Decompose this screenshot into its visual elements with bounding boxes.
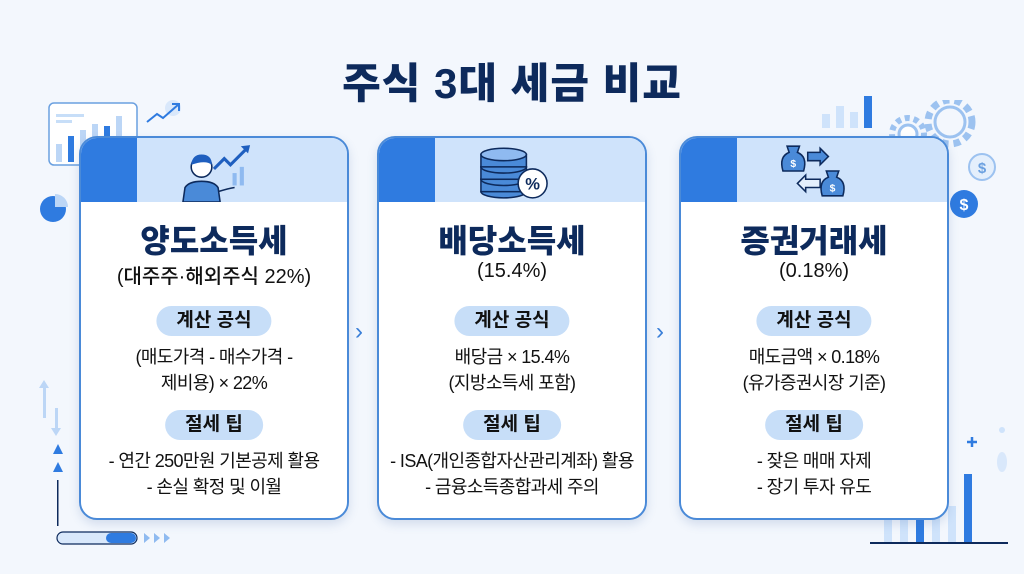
tips text: - 손실 확정 및 이월 bbox=[147, 477, 281, 497]
heading: 양도소득세 bbox=[140, 223, 288, 259]
decor: bars bottom right bbox=[870, 427, 1008, 544]
icon: person with rising chart bbox=[182, 145, 250, 202]
heading: 증권거래세 bbox=[740, 223, 888, 259]
icon: coins with percent: % bbox=[525, 175, 540, 194]
pill: tips: 절세 팁 bbox=[185, 414, 243, 435]
formula text bbox=[743, 347, 885, 393]
formula text bbox=[135, 347, 293, 393]
decor: gears and coins: $ bbox=[960, 197, 969, 214]
panel: 증권거래세 bbox=[679, 136, 949, 520]
rate: (15.4%) bbox=[477, 260, 547, 282]
tips text: - 장기 투자 유도 bbox=[757, 477, 871, 497]
rate: (대주주·해외주식 22%) bbox=[117, 266, 311, 288]
tips text: - 금융소득종합과세 주의 bbox=[425, 477, 599, 497]
formula text: 매도금액 × 0.18% bbox=[749, 347, 879, 367]
pill: formula: 계산 공식 bbox=[176, 310, 252, 331]
panel: 양도소득세 bbox=[79, 136, 349, 520]
decor: gears and coins bbox=[889, 100, 996, 218]
tips text bbox=[757, 451, 871, 497]
icon: money bags exchange: $ bbox=[790, 159, 796, 170]
decor: pie bbox=[40, 194, 68, 222]
title: 주식 3대 세금 비교 bbox=[342, 60, 682, 107]
formula text bbox=[449, 347, 575, 393]
pill: formula bbox=[156, 306, 272, 336]
formula text: (매도가격 - 매수가격 - bbox=[135, 347, 293, 367]
pill: tips: 절세 팁 bbox=[785, 414, 843, 435]
tips text: - 잦은 매매 자제 bbox=[757, 451, 871, 471]
decor: up/down arrows left bbox=[39, 380, 63, 526]
formula text: 배당금 × 15.4% bbox=[455, 347, 569, 367]
pill: formula: 계산 공식 bbox=[474, 310, 550, 331]
tips text bbox=[390, 451, 634, 497]
decor: bars top right bbox=[822, 96, 872, 128]
arrow: › bbox=[656, 318, 664, 345]
icon: money bags exchange bbox=[780, 145, 845, 197]
formula text: (유가증권시장 기준) bbox=[743, 373, 885, 393]
pill: tips bbox=[165, 410, 263, 440]
formula text: (지방소득세 포함) bbox=[449, 373, 575, 393]
decor: chart card top left bbox=[48, 102, 138, 166]
icon: coins with percent bbox=[480, 148, 548, 199]
decor: gears and coins: $ bbox=[978, 160, 987, 177]
pill: tips: 절세 팁 bbox=[483, 414, 541, 435]
tips text: - ISA(개인종합자산관리계좌) 활용 bbox=[390, 451, 634, 471]
pill: formula bbox=[454, 306, 570, 336]
decor: progress bar bbox=[56, 531, 170, 545]
decor: trend arrow bbox=[146, 100, 181, 123]
tips text: - 연간 250만원 기본공제 활용 bbox=[109, 451, 319, 471]
icon: money bags exchange: $ bbox=[830, 184, 836, 195]
formula text: 제비용) × 22% bbox=[161, 373, 267, 393]
pill: formula bbox=[756, 306, 872, 336]
panel: 배당소득세 bbox=[377, 136, 647, 520]
heading: 배당소득세 bbox=[438, 223, 586, 259]
pill: tips bbox=[765, 410, 863, 440]
pill: tips bbox=[463, 410, 561, 440]
arrow: › bbox=[355, 318, 363, 345]
tips text bbox=[109, 451, 320, 497]
rate: (0.18%) bbox=[779, 260, 849, 282]
pill: formula: 계산 공식 bbox=[776, 310, 852, 331]
